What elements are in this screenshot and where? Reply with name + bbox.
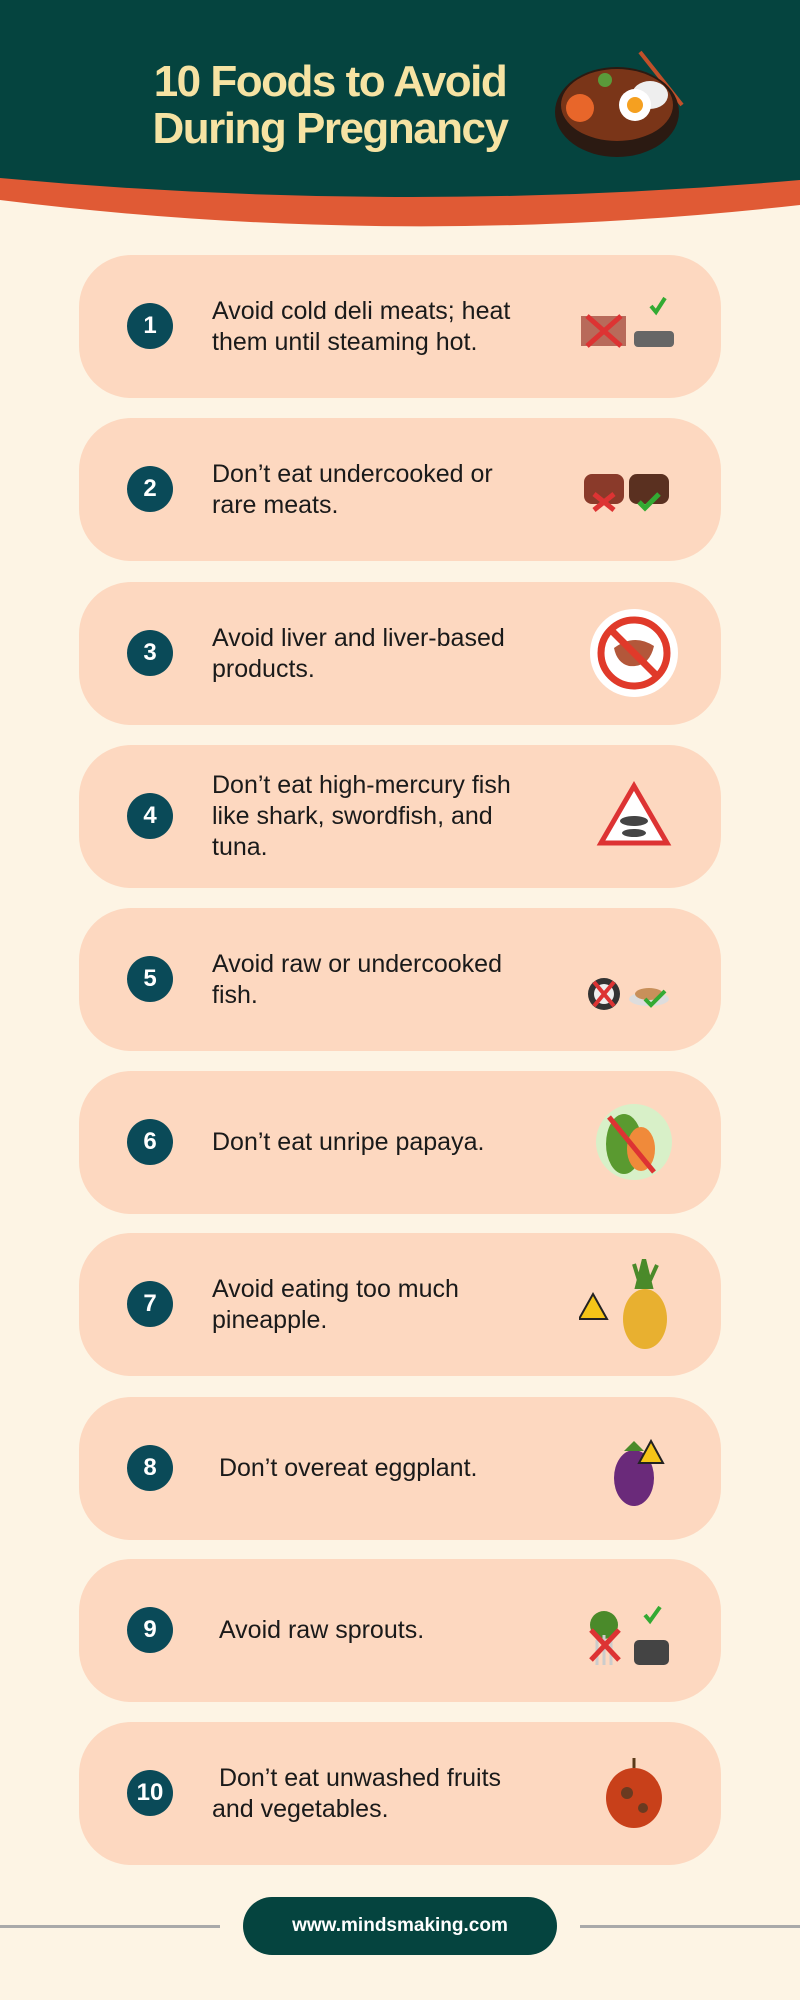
card 4: 4 [143,802,157,829]
card 10: Don’t eat unwashed fruits and vegetables. [212,1764,501,1822]
card 8: 8 [143,1454,157,1481]
card 2 [79,418,721,561]
card 3: 3 [143,639,157,666]
footer lines [0,1925,220,1928]
icon: warning fish [596,781,672,846]
card 3: Avoid liver and liver-based products. [212,624,505,682]
icon: sandwich crossed, pot checked [581,296,674,348]
card 6 [79,1071,721,1214]
icon: warning pineapple [579,1259,667,1349]
icon: food bowl [555,50,684,157]
card 7: 7 [143,1290,157,1317]
card 5 [79,908,721,1051]
card 7 [79,1233,721,1376]
card 5: 5 [143,965,157,992]
card 7: Avoid eating too much pineapple. [212,1274,459,1334]
title [153,57,509,153]
card 2: Don’t eat undercooked or rare meats. [212,460,493,518]
footer: website: www.mindsmaking.com [292,1915,508,1936]
card 5: Avoid raw or undercooked fish. [212,950,502,1008]
card 6: 6 [143,1128,157,1155]
footer: website [243,1897,557,1955]
icon: no liver [590,609,678,697]
card 1 [79,255,721,398]
icon: eggplant warning [614,1439,665,1506]
card 4: Don’t eat high-mercury fish like shark, swordfish, and tuna. [212,771,511,861]
icon: sprouts crossed, pot checked [589,1606,669,1665]
card 3 [79,582,721,725]
icon: dirty apple [606,1758,662,1828]
card 4 [79,745,721,888]
card 2: 2 [143,475,157,502]
title: During Pregnancy [153,104,507,153]
title: 10 Foods to Avoid [154,57,506,106]
header background [0,0,800,226]
card 10: 10 [137,1779,163,1806]
card 1: Avoid cold deli meats; heat them until steaming hot. [212,296,510,356]
icon: steaks [584,474,669,512]
card 10 [79,1722,721,1865]
card 6: Don’t eat unripe papaya. [212,1128,484,1156]
card 9: Avoid raw sprouts. [219,1616,424,1644]
card 8 [79,1397,721,1540]
card 9 [79,1559,721,1702]
icon: sushi crossed, cooked fish checked [588,978,669,1010]
card 8: Don’t overeat eggplant. [219,1454,477,1482]
card 9: 9 [143,1616,157,1643]
card 1: 1 [143,312,157,339]
icon: papaya [596,1104,672,1180]
